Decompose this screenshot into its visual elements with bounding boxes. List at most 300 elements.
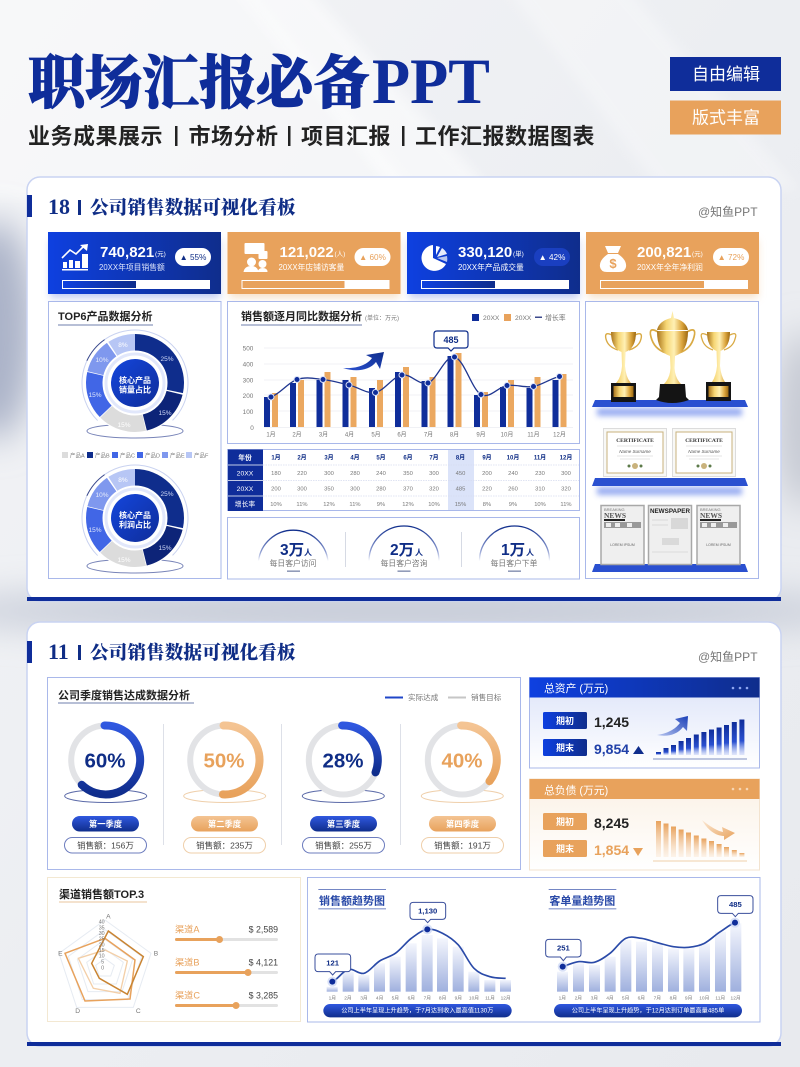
main title: 职场汇报必备 [28,51,370,116]
month labels: 9月 [455,995,462,1001]
radar chart: 40 [99,920,105,926]
value: opening [543,813,629,831]
KPI: project sales: (元) [155,250,166,258]
main title [28,45,490,117]
value: opening: 8,245 [594,815,629,831]
table row: header: 年份 [238,453,252,462]
legend: 销售目标 [471,692,502,702]
panel: daily customer stats [228,518,580,579]
y axis labels [243,346,254,432]
table row: first year [237,470,571,478]
caption pill [323,1004,512,1017]
arrow: upward trend [343,352,384,370]
month labels: 11月 [715,995,725,1001]
KPI: product volume: (単) [513,249,524,258]
subtitle: 业务成果展示 [28,124,163,149]
table row: second year: 320 [561,486,571,492]
value: closing [543,840,643,858]
quarter 1: 销售额：156万 [77,840,134,850]
blue bars [264,356,558,427]
KPI: product volume: 330,120 [458,244,512,261]
certificate: left: CERTIFICATE [616,438,654,444]
quarter 2 [184,725,266,853]
quarter 4: 40% [441,750,483,772]
donut chart: sales share [65,313,205,453]
KPI: project sales: 20XX年项目销售额 [99,262,165,272]
KPI: product volume: ▲ 42% [539,253,565,262]
table row: second year: 20XX [237,486,254,493]
month labels: 5月 [392,995,399,1001]
y axis labels: 400 [243,362,254,368]
panel: total liabilities: 总负债 (万元) [544,783,608,797]
card heading 11 [27,639,296,664]
table row: first year: 350 [403,471,413,477]
month labels: 11月 [485,995,495,1001]
panel: total assets: 总资产 (万元) [544,681,608,695]
month labels: 10月 [699,995,709,1001]
donut legend: 产品D [145,452,160,460]
newspaper: right: NEWS [700,511,722,520]
newspaper: left [601,506,644,564]
certificate: right: Name Surname [688,449,720,454]
newspaper: right: LOREM IPSUM [706,543,731,547]
chart: sales trend [315,889,512,1017]
subtitle: 市场分析 [188,124,279,149]
table row: header: 3月 [324,454,334,462]
donut chart: profit share: 15% [88,527,102,534]
month labels: 7月 [424,995,431,1001]
radar chart: C [136,1008,141,1015]
x axis labels: 7月 [424,432,433,438]
donut legend: 产品F [194,452,209,460]
KPI: net profit: (元) [692,250,703,258]
quarter 4: 第四季度 [446,819,480,829]
panel: dashboard card 11 [27,622,781,1046]
quarter 2: 第二季度 [208,819,242,829]
table row: first year: 300 [429,471,439,477]
KPI: store visitors: (人) [334,250,345,258]
table row: header: 12月 [560,454,572,462]
x axis labels [266,432,566,438]
donut chart: profit share: 8% [118,477,128,484]
KPI: project sales [48,232,221,298]
table row: first year: 20XX [237,470,254,478]
radar chart: 20 [99,942,105,948]
chart legend [472,313,566,322]
trophy: right [701,332,736,401]
table row: second year: 370 [403,486,413,492]
panel: monthly sales combo chart [228,302,580,444]
value: closing [543,739,644,757]
table row: first year: 220 [297,471,307,477]
icon: money bag: $ [609,256,617,271]
callout: 1,130 [410,902,446,934]
panel: trend charts [308,878,760,1022]
certificate: left: Name Surname [619,449,651,454]
chart legend: 20XX [515,315,532,322]
table row: second year: 260 [508,486,518,492]
panel: TOP6 product donuts [48,302,221,588]
month labels: 6月 [638,995,645,1001]
table row: growth rate: 8% [483,502,491,508]
newspaper: right: BREAKING [700,507,721,512]
shelf 1 [592,400,748,416]
callout: 251: 251 [557,944,570,953]
table row: header: 1月 [271,454,281,462]
chart heading: 销售额逐月同比数据分析 [241,309,362,323]
radar chart: E [58,950,63,957]
donut chart: sales share: 15% [117,422,131,429]
donut legend: 产品E [170,452,185,460]
card heading 18: 公司销售数据可视化看板 [90,197,296,219]
y axis labels: 300 [243,378,254,384]
value: closing: 9,854 [594,741,629,757]
callout: 251 [546,939,581,972]
radar chart: 25 [99,937,105,943]
panel: quarterly achievement [48,678,520,870]
value: opening: 1,245 [594,714,629,730]
stat: visits: 3万 [280,542,304,559]
bars [557,923,741,992]
chart legend: 20XX [483,315,500,322]
table row: header: 11月 [534,454,546,462]
tag: rich layouts [670,100,781,134]
x axis labels: 12月 [553,432,566,438]
donut legend: 产品B [95,452,110,460]
month labels [559,995,741,1001]
panel: total liabilities [530,779,760,870]
chart: order value trend [546,889,753,1017]
newspaper: centre: NEWSPAPER [650,508,691,515]
tag: rich layouts: 版式丰富 [692,108,760,128]
table row: first year: 450 [456,471,465,477]
panel heading: 渠道销售额TOP.3 [59,887,144,901]
radar chart: 5 [101,959,104,965]
KPI: product volume: 20XX年产品成交量 [458,262,524,272]
table row: header: 7月 [429,454,439,462]
quarter 4: 销售额：191万 [434,840,491,850]
orange bars [272,353,566,427]
table row: first year: 300 [561,471,571,477]
table row: growth rate [235,500,572,508]
month labels: 1月 [329,995,336,1001]
table row: second year: 220 [482,486,492,492]
radar chart: 0 [101,965,104,971]
shelf 2 [592,478,748,495]
newspaper: left: BREAKING [604,507,625,512]
month labels: 2月 [344,995,352,1001]
x axis labels: 8月 [450,432,459,438]
table row: growth rate: 10% [428,502,440,508]
radar chart: 35 [99,925,105,931]
stat: orders: 1万 [501,542,525,559]
trophy: centre with lid [650,311,695,403]
subtitle: 项目汇报 [301,124,391,149]
value: closing: 1,854 [594,842,629,858]
shelf 3 [592,564,748,572]
table row: growth rate: 11% [349,502,361,508]
callout: 485: 485 [443,335,459,345]
icon: people with speech bubbles [244,243,268,272]
card heading 18 [27,194,296,219]
month labels: 8月 [439,995,446,1001]
month labels: 9月 [685,995,692,1001]
month labels: 10月 [469,995,479,1001]
stat: orders: 人 [526,548,534,557]
KPI: product volume [407,232,580,298]
month labels: 2月 [575,995,582,1001]
legend: 实际达成 [408,692,439,702]
callout: 1,130: 1,130 [418,906,437,915]
stat: orders [480,526,550,572]
table row: first year: 200 [482,471,492,477]
callout: 485 [718,896,753,928]
trend line [332,929,506,982]
icon: pie chart [422,245,447,271]
caption pill: 公司上半年呈现上升趋势，于7月达到收入最高值1130万 [341,1006,493,1014]
table row: first year: 240 [376,471,386,477]
chart heading: 客单量趋势图 [549,893,615,907]
donut chart: profit share: 核心产品 [119,510,151,520]
stat: enquiries: 2万 [390,542,414,559]
callout: 121 [315,954,351,987]
chart heading [241,309,399,326]
bar chart: assets [656,720,744,755]
newspaper: centre [648,506,692,564]
channel C: $ 3,285 [249,990,278,1000]
donut chart: sales share: 25% [160,356,174,363]
x axis labels: 9月 [476,432,486,438]
table row: header: 9月 [482,454,492,462]
quarter 2: 销售额：235万 [196,840,253,850]
table row: header: 10月 [507,454,519,462]
stat: orders: 每日客户下单 [491,558,538,568]
quarter 2: 50% [203,750,245,772]
trophy: left [606,332,641,402]
donut chart: sales share: 15% [88,392,102,399]
KPI: net profit [586,232,759,298]
table row: header: 4月 [350,454,360,462]
bar chart: liabilities [656,821,744,857]
donut legend: 产品A [70,452,85,460]
table row: second year: 300 [350,486,360,492]
stat: visits: 人 [304,548,312,557]
channel A: $ 2,589 [249,924,278,934]
table row: first year: 300 [324,471,334,477]
quarter 3: 第三季度 [327,819,361,829]
quarter 3: 28% [322,750,364,772]
KPI: project sales: 740,821 [100,244,154,261]
card heading 11: 11 [48,639,69,664]
month labels: 12月 [731,995,741,1001]
KPI: net profit: 200,821 [637,244,691,261]
month labels: 6月 [408,995,415,1001]
donut legend [62,452,209,460]
stat: enquiries: 每日客户咨询 [381,558,428,568]
callout: 485: 485 [729,900,742,909]
watermark: @知鱼PPT [698,205,758,219]
KPI: store visitors: ▲ 60% [359,253,386,262]
KPI: store visitors: 20XX年店铺访客量 [278,262,345,272]
table row: growth rate: 10% [534,502,546,508]
table row: header [238,453,572,462]
certificate: left [604,428,666,476]
bars [327,935,511,992]
panel heading: 公司季度销售达成数据分析 [58,688,190,702]
quarter 4 [421,725,504,853]
quarter 3 [302,725,384,853]
donut legend: 产品C [120,452,135,460]
growth line [268,354,562,400]
x axis labels: 10月 [501,432,513,438]
channel C [175,990,278,1009]
value: opening: 期初 [556,816,574,827]
month labels: 3月 [360,995,368,1001]
x axis labels: 11月 [527,432,540,438]
month labels: 4月 [376,995,383,1001]
x axis labels: 1月 [266,432,276,438]
x axis labels: 5月 [371,432,381,438]
callout: 121: 121 [326,958,340,967]
table row: first year: 180 [271,471,281,477]
newspaper: right [697,506,740,564]
caption pill [554,1004,742,1017]
legend [385,692,502,702]
donut chart: profit share: 10% [95,492,109,499]
table row: growth rate: 11% [560,502,572,508]
table row: growth rate: 10% [270,502,282,508]
table row: second year: 350 [324,486,334,492]
table row: second year: 280 [376,486,386,492]
x axis labels: 4月 [345,432,354,438]
KPI: store visitors: 121,022 [280,244,334,261]
chart heading [549,889,616,909]
radar chart: B [154,950,159,957]
card heading 11: 公司销售数据可视化看板 [90,642,296,664]
quarter 3: 销售额：255万 [315,840,372,850]
channel A [175,924,278,943]
donut chart: profit share: 15% [117,557,131,564]
subtitle: 工作汇报数据图表 [415,124,595,149]
card heading 18: 18 [48,194,70,219]
value: opening [543,712,629,730]
month labels: 4月 [606,995,614,1001]
tag: free editing: 自由编辑 [692,65,760,84]
stat: enquiries: 人 [415,548,423,557]
table row: first year: 280 [350,471,360,477]
donut chart: profit share: 25% [160,491,174,498]
donut chart: sales share: 15% [158,410,172,417]
table row: first year: 240 [508,471,518,477]
table row: second year: 300 [297,486,307,492]
stat: visits: 每日客户访问 [270,558,317,568]
table row: header: 5月 [376,454,386,462]
table row: growth rate: 12% [323,502,335,508]
channel A: 渠道A [175,924,200,934]
tag: free editing [670,57,781,91]
channel C: 渠道C [175,990,200,1000]
radar chart: D [75,1008,80,1015]
table row: header: 6月 [403,454,413,462]
panel: dashboard card 18 [27,177,781,601]
table row: second year: 320 [429,486,439,492]
chart heading: (单位：万元) [365,314,399,322]
panel: trophy shelves [586,302,758,578]
KPI: net profit: ▲ 72% [718,253,744,262]
certificate: right [672,428,736,476]
chart heading: 销售额趋势图 [319,893,385,907]
x axis labels: 6月 [397,432,407,438]
stat: visits [258,530,328,572]
y axis labels: 200 [243,393,254,400]
table row: second year: 485 [456,486,465,492]
month labels: 5月 [622,995,629,1001]
certificate: right: CERTIFICATE [685,438,723,444]
y axis labels: 500 [243,346,254,352]
table row: second year: 200 [271,486,281,492]
icon: money bag [600,246,626,272]
caption pill: 公司上半年呈现上升趋势，于12月达到订单最高量485单 [572,1006,724,1014]
quarter 1: 60% [84,750,126,772]
stat: enquiries [369,526,439,572]
data table [228,450,580,511]
table row: header: 2月 [297,454,307,462]
x axis labels: 3月 [319,432,328,438]
quarter 1: 第一季度 [89,819,123,829]
callout: 485 [434,331,468,351]
table row: growth rate: 12% [402,502,414,508]
donut chart: sales share: 核心产品 [119,375,151,385]
y axis labels: 0 [250,425,254,432]
table row: growth rate: 15% [455,502,466,508]
panel: channel sales radar [48,878,300,1022]
y axis labels: 100 [243,409,254,416]
donut chart: sales share: 8% [118,342,128,349]
channel B: 渠道B [175,956,200,968]
radar chart: 15 [99,948,105,954]
value: closing: 期末 [556,843,574,854]
donut chart: profit share: 利润占比 [119,520,151,530]
month labels [329,995,511,1001]
radar chart: 10 [99,954,105,960]
donut chart: profit share: 15% [158,545,172,552]
month labels: 12月 [501,995,511,1001]
KPI: project sales: ▲ 55% [180,253,206,262]
channel B: $ 4,121 [249,958,278,968]
table row: first year: 230 [535,471,545,477]
donut chart: sales share: 10% [95,357,109,364]
chart heading [318,889,386,909]
arrow: liabilities down [702,820,735,840]
channel B [175,956,278,976]
value: closing: 期末 [556,742,574,753]
month labels: 3月 [591,995,598,1001]
table row: growth rate: 9% [377,502,385,508]
donut chart: sales share: 销量占比 [119,384,151,394]
table row: growth rate: 9% [509,502,517,508]
icon: rising bar chart [62,244,88,270]
table row: second year: 310 [535,486,545,492]
KPI: store visitors [228,232,400,298]
value: opening: 期初 [556,715,574,726]
trend line [563,923,735,967]
month labels: 8月 [670,995,677,1001]
x axis labels: 2月 [292,432,302,438]
quarter 1 [64,725,147,853]
radar chart: 30 [99,931,105,937]
table row: header: 8月 [456,454,465,462]
watermark: @知鱼PPT [698,650,758,664]
